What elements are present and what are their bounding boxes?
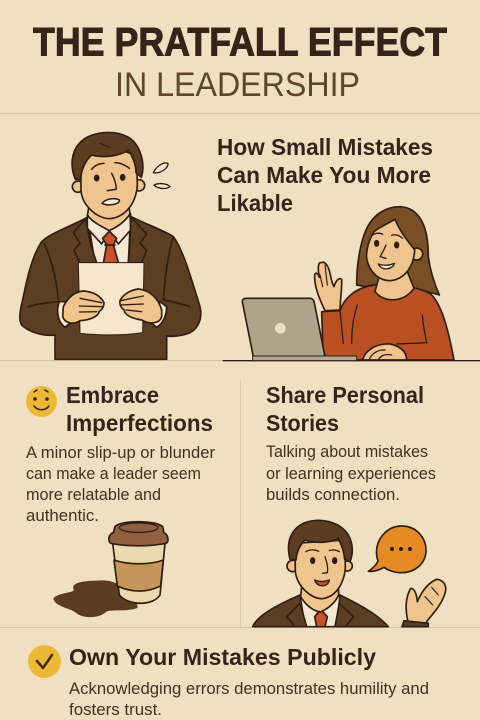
body text: builds connection. <box>266 486 400 504</box>
smile <box>378 263 394 269</box>
hair <box>72 132 143 179</box>
face <box>81 150 137 219</box>
neck <box>87 202 130 231</box>
hair <box>357 207 439 295</box>
heading: Imperfections <box>66 410 213 436</box>
body text <box>69 680 429 719</box>
lapels <box>73 217 147 263</box>
raised hand <box>315 262 342 311</box>
heading <box>266 382 424 436</box>
heading: Embrace <box>66 382 159 408</box>
ears <box>287 560 298 572</box>
eyes and brows <box>95 175 99 181</box>
face <box>295 540 345 599</box>
jacket <box>20 216 201 359</box>
ears <box>72 181 84 192</box>
waving hand <box>403 579 446 626</box>
collar <box>87 214 131 244</box>
speech bubble <box>368 526 426 573</box>
heading: Own Your Mistakes Publicly <box>69 644 376 670</box>
laptop <box>242 298 325 357</box>
heading <box>66 382 213 436</box>
cup lid <box>109 522 168 546</box>
subtitle heading: Likable <box>217 190 293 216</box>
icon: check badge <box>28 645 61 678</box>
desk line <box>223 359 480 363</box>
tie <box>103 231 119 263</box>
body text: fosters trust. <box>69 701 162 719</box>
sweat drops <box>153 163 170 188</box>
neck <box>301 585 339 612</box>
icon: smiley <box>26 386 57 417</box>
neck <box>375 270 414 300</box>
jacket <box>253 595 388 627</box>
hand on desk <box>363 344 407 360</box>
illustration: smiling woman at laptop <box>223 207 480 361</box>
right cuff and hand <box>152 302 167 327</box>
heading: Share Personal <box>266 382 424 408</box>
body text: more relatable and <box>26 486 161 504</box>
body text: A minor slip-up or blunder <box>26 444 216 462</box>
body text: or learning experiences <box>266 465 436 483</box>
body text: Talking about mistakes <box>266 443 428 461</box>
coffee spill <box>53 580 138 617</box>
subtitle heading: How Small Mistakes <box>217 134 433 160</box>
smile <box>315 580 329 586</box>
body text: Acknowledging errors demonstrates humility and <box>69 680 429 698</box>
worried mouth <box>102 199 119 205</box>
panel: own your mistakes publicly <box>28 644 429 719</box>
left cuff and hand <box>58 302 70 327</box>
hair <box>289 520 352 562</box>
ear <box>411 248 423 260</box>
eyes and nose <box>311 558 314 563</box>
body text: can make a leader seem <box>26 465 201 483</box>
body text <box>266 443 436 504</box>
sweater <box>322 284 454 360</box>
face <box>367 219 415 281</box>
illustration: man talking with speech bubble <box>253 520 446 627</box>
panel: embrace imperfections <box>26 382 216 617</box>
shirt <box>87 214 131 263</box>
lapels <box>287 603 353 627</box>
title line 2: IN LEADERSHIP <box>115 66 360 104</box>
illustration: nervous leader holding paper <box>20 132 201 359</box>
body text <box>26 444 216 525</box>
heading: Stories <box>266 410 339 436</box>
title <box>33 20 447 104</box>
cup sleeve <box>114 560 163 591</box>
paper <box>78 263 144 335</box>
cup body <box>113 543 165 603</box>
subtitle heading <box>217 134 433 216</box>
subtitle heading: Can Make You More <box>217 162 431 188</box>
illustration: spilled coffee cup <box>53 522 168 617</box>
shirt <box>300 595 340 627</box>
body text: authentic. <box>26 507 99 525</box>
panel: share personal stories <box>253 382 446 627</box>
eyes and nose <box>375 241 378 246</box>
tie <box>315 609 327 627</box>
